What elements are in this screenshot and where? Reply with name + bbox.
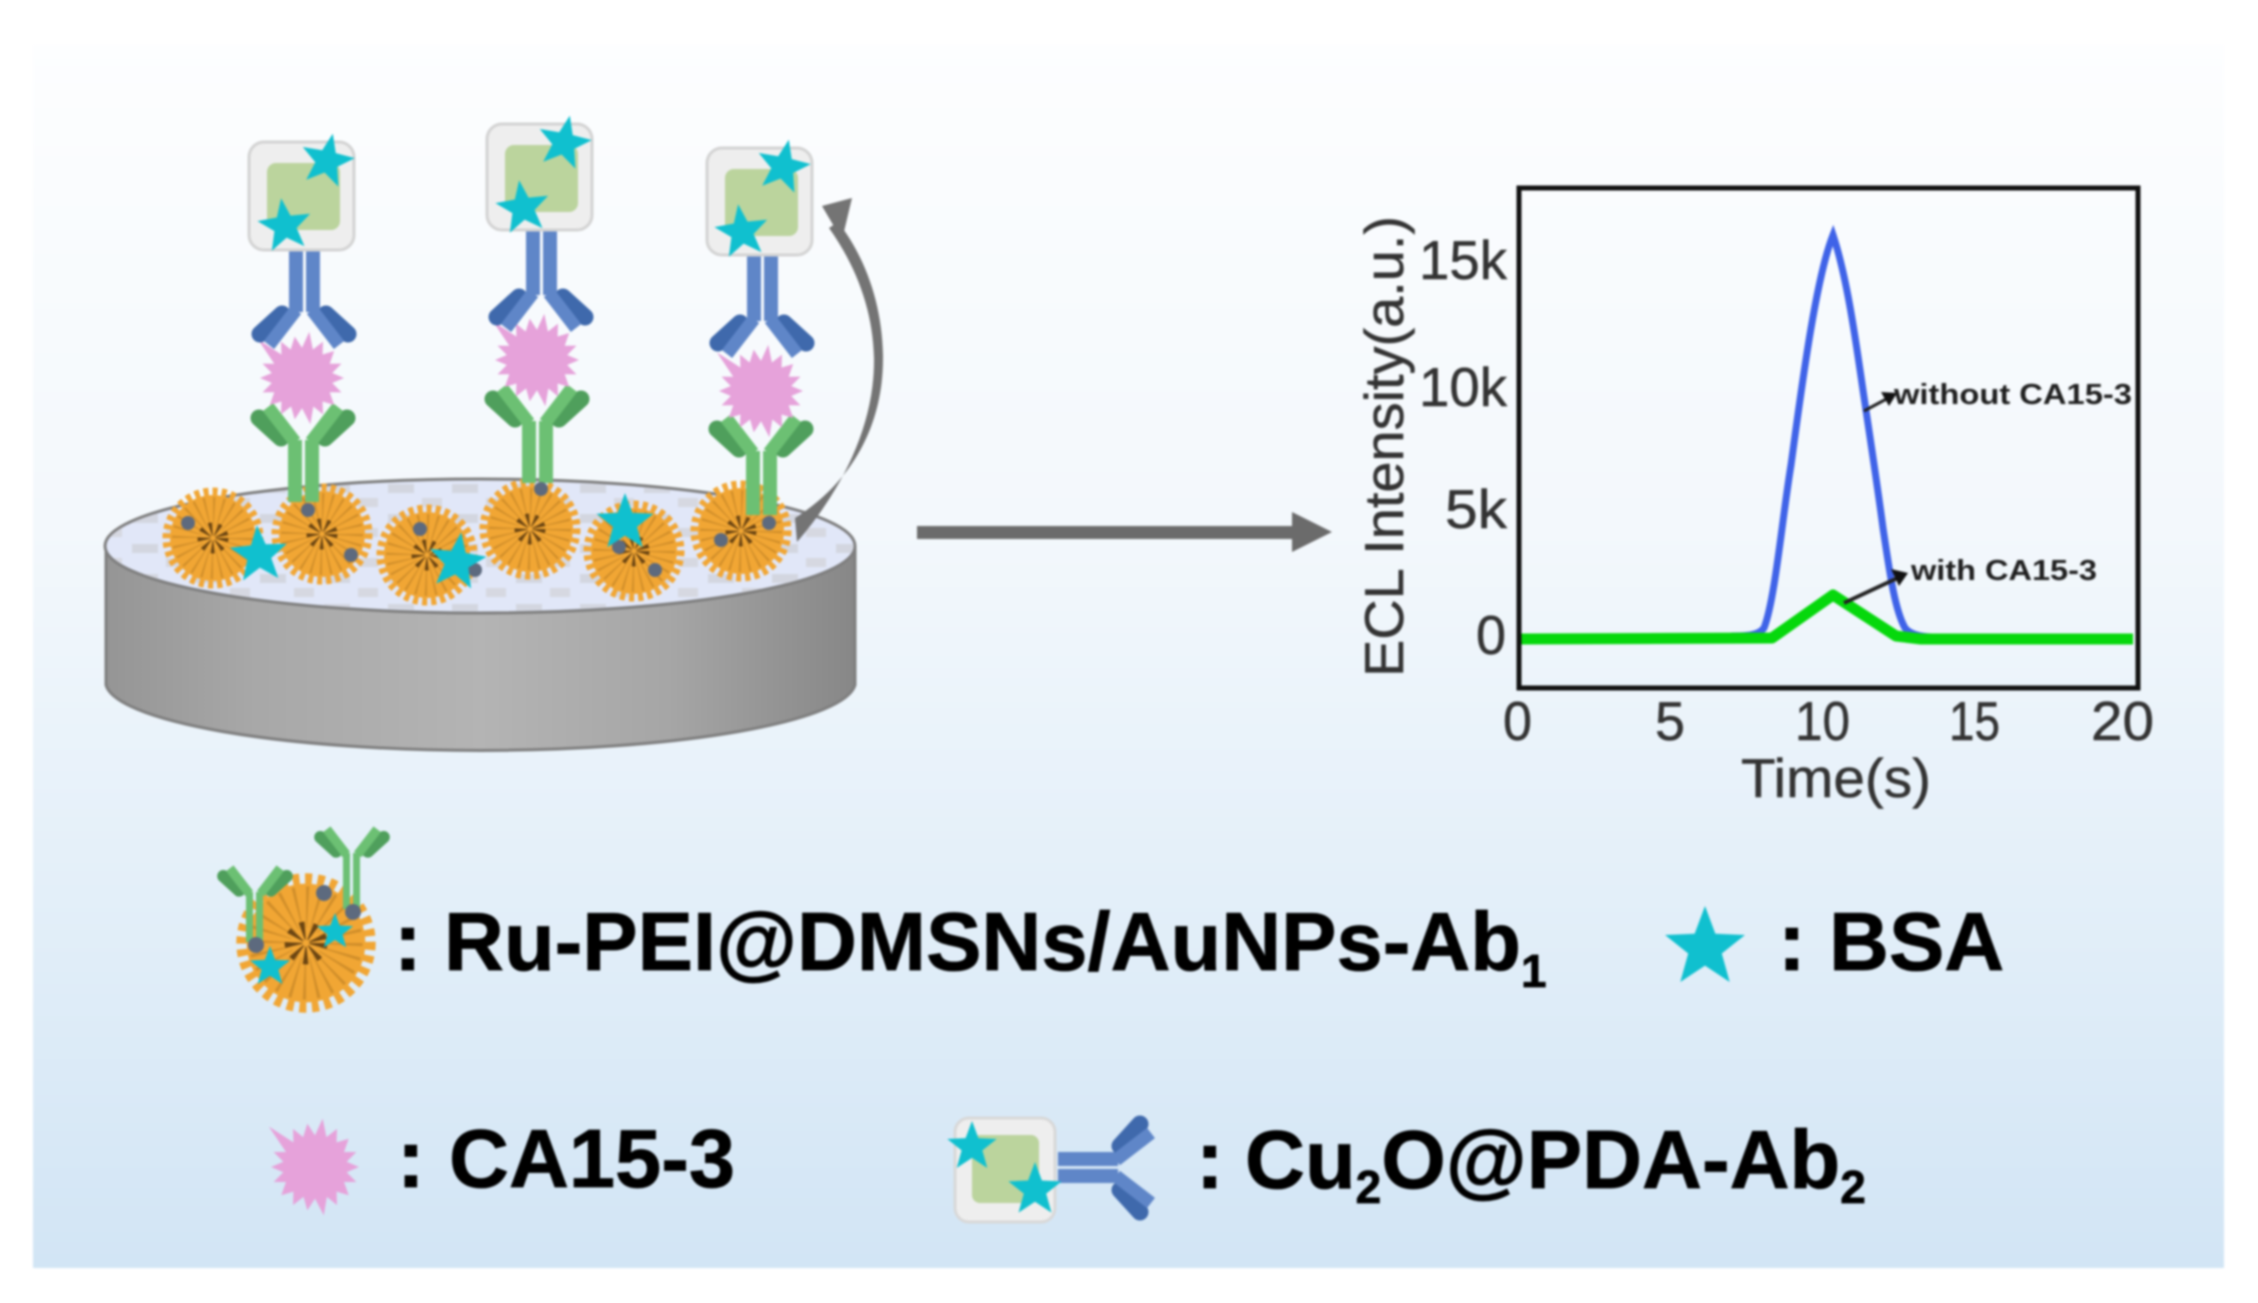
icon: Ru-PEI@DMSNs/AuNPs-Ab1 nanoparticle [223,829,384,1006]
x tick labels: 10 [1795,690,1850,752]
icon: Cu2O@PDA-Ab2 conjugate [947,1118,1151,1222]
label: Cu2O@PDA-Ab2: 2 [1840,1161,1866,1213]
nanoparticles on the electrode [167,483,787,601]
x tick labels: 20 [2091,690,2154,752]
icon: CA15-3 burst [269,1119,359,1215]
label: CA15-3: : [397,1112,425,1205]
annotation: with CA15-3: with CA15-3 [1910,555,2097,587]
legend [223,829,2004,1222]
x tick labels: 15 [1949,690,2000,752]
y tick labels: 5k [1445,478,1508,540]
label: Cu2O@PDA-Ab2: O@PDA-Ab [1381,1113,1840,1206]
label: CA15-3: CA15-3 [449,1112,735,1205]
label: Cu2O@PDA-Ab2: 2 [1356,1161,1381,1213]
gold nanoparticle dots [181,482,776,577]
chart: ECL intensity versus time [1353,188,2154,809]
arrow: curved energy transfer [795,198,883,542]
column 3 immunocomplex [707,134,815,515]
y tick labels: 15k [1419,229,1507,291]
y tick labels [1419,229,1508,666]
y axis title: ECL Intensity(a.u.) [1353,216,1415,677]
BSA stars on the electrode [228,493,654,590]
label: BSA: BSA [1829,895,2004,988]
x tick labels: 5 [1655,690,1685,752]
label: Ru-PEI@DMSNs/AuNPs-Ab1: 1 [1521,945,1547,997]
x tick labels: 0 [1503,690,1532,752]
label: Ru-PEI@DMSNs/AuNPs-Ab1: : [394,895,422,988]
arrow: electrode to chart [917,512,1332,552]
y tick labels: 0 [1476,604,1506,666]
panel: electrode with sandwich immunoassay [105,110,883,750]
annotation: with CA15-3 [1844,555,2097,603]
label: Cu2O@PDA-Ab2: : [1196,1113,1224,1206]
annotation: without CA15-3: without CA15-3 [1893,379,2132,411]
y tick labels: 10k [1419,356,1507,418]
label: BSA: : [1778,895,1806,988]
column 2 immunocomplex [487,110,596,483]
x tick labels [1503,690,2154,752]
column 1 immunocomplex [249,128,359,502]
icon: BSA star [1665,906,1745,982]
plot frame [1519,188,2138,688]
label: Cu2O@PDA-Ab2: Cu [1245,1113,1356,1206]
electrode disc [105,479,855,750]
label: Ru-PEI@DMSNs/AuNPs-Ab1: Ru-PEI@DMSNs/AuNPs-Ab [444,895,1521,988]
curve: with CA15-3 [1519,595,2133,639]
x axis title: Time(s) [1741,747,1931,809]
curve: without CA15-3 [1731,235,1937,637]
